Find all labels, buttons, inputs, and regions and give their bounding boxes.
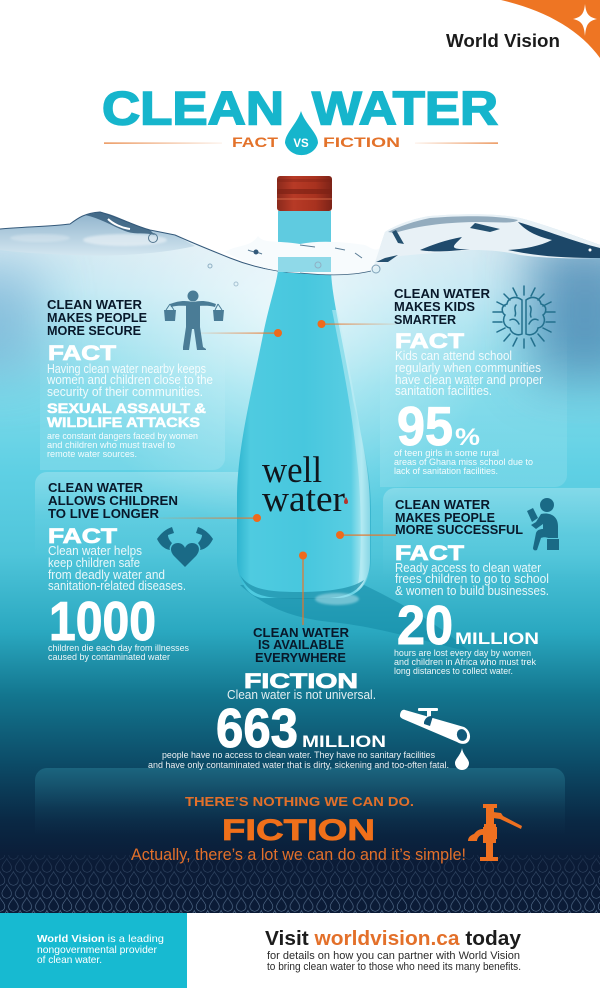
panel: nothing we can do background — [35, 768, 565, 835]
icon: brand drop — [344, 497, 348, 504]
block: makes people more secure: FACT — [48, 342, 116, 365]
footer: teal about box — [0, 913, 187, 988]
block: makes people more successful — [394, 497, 549, 677]
connector: live longer — [160, 514, 261, 522]
subtitle: Fact vs Fiction: FICTION — [323, 134, 400, 150]
footer: teal about box: nongovernmental provider — [37, 944, 157, 956]
block: makes kids smarter: have clean water and proper — [395, 373, 543, 387]
block: nothing we can do, fiction — [131, 795, 466, 864]
block: available everywhere, fiction: 663 — [216, 697, 298, 759]
icon: title water drop: VS — [293, 138, 309, 150]
logo corner: orange arc with star — [501, 0, 600, 58]
block: makes people more successful: FACT — [395, 542, 464, 565]
block: makes kids smarter: MAKES KIDS — [394, 299, 475, 314]
block: makes people more successful: CLEAN WATER — [395, 497, 491, 512]
block: allows children to live longer: keep children safe — [48, 556, 140, 570]
block: makes kids smarter: Kids can attend school — [395, 349, 512, 363]
block: makes people more secure: MAKES PEOPLE — [47, 310, 147, 325]
connector: smarter — [318, 320, 396, 328]
title: Clean Water — [102, 82, 498, 134]
block: makes people more successful: long distances to collect water. — [394, 666, 513, 677]
block: makes people more secure: Having clean water nearby keeps — [47, 362, 206, 376]
block: makes people more successful: & women to build businesses. — [395, 584, 549, 598]
text: bottle brand well water: water — [262, 479, 345, 520]
block: available everywhere, fiction: EVERYWHERE — [255, 650, 346, 665]
block: makes people more secure: WILDLIFE ATTACKS — [47, 415, 200, 430]
block: makes kids smarter — [394, 286, 543, 477]
block: makes people more successful: Ready access to clean water — [395, 561, 541, 575]
block: makes people more successful: MAKES PEOPLE — [395, 510, 495, 525]
block: available everywhere, fiction: FICTION — [244, 670, 358, 693]
block: makes kids smarter: areas of Ghana miss school due to — [394, 457, 533, 468]
block: makes people more secure: MORE SECURE — [47, 323, 141, 338]
block: allows children to live longer: CLEAN WATER — [48, 480, 144, 495]
block: makes kids smarter: sanitation facilities. — [395, 384, 492, 398]
block: makes kids smarter: CLEAN WATER — [394, 286, 491, 301]
panel: bottle floor shadow — [240, 583, 470, 652]
block: available everywhere, fiction — [148, 625, 449, 771]
icon: heart with muscle arms — [157, 527, 213, 567]
block: makes people more secure — [46, 297, 213, 460]
block: makes people more successful: frees children to go to school — [395, 572, 549, 586]
block: makes people more successful: 20 — [397, 594, 453, 656]
block: makes people more secure: are constant dangers faced by women — [47, 431, 198, 442]
icon: title water drop — [285, 111, 318, 155]
block: makes kids smarter: FACT — [395, 330, 464, 353]
block: makes people more successful: MORE SUCCESSFUL — [395, 522, 523, 537]
block: available everywhere, fiction: CLEAN WATER — [253, 625, 350, 640]
subtitle: Fact vs Fiction — [104, 134, 498, 150]
footer: call to action: Visit worldvision.ca today — [265, 928, 522, 950]
icon: pipe with falling drop — [400, 708, 470, 770]
block: makes people more secure: and children who must travel to — [47, 440, 175, 451]
footer: teal about box: of clean water. — [37, 954, 102, 966]
block: allows children to live longer: 1000 — [49, 590, 156, 652]
block: available everywhere, fiction: people have no access to clean water. They have no sanitary facilities — [162, 750, 435, 761]
block: allows children to live longer: caused by contaminated water — [48, 652, 170, 663]
block: makes people more secure: remote water sources. — [47, 449, 137, 460]
block: makes people more successful: hours are lost every day by women — [394, 648, 531, 659]
footer: call to action — [265, 928, 522, 973]
block: allows children to live longer: TO LIVE LONGER — [48, 506, 160, 521]
block: makes kids smarter: of teen girls in some rural — [394, 448, 499, 459]
footer: call to action: for details on how you can partner with World Vision — [267, 950, 520, 962]
block: nothing we can do, fiction: FICTION — [222, 814, 375, 847]
block: available everywhere, fiction: and have only contaminated water that is dirty, sickening and too-often fatal. — [148, 760, 449, 771]
footer: call to action: to bring clean water to those who need its many benefits. — [267, 961, 521, 973]
connector: available everywhere — [299, 552, 307, 625]
block: nothing we can do, fiction: Actually, there’s a lot we can do and it’s simple! — [131, 845, 466, 864]
background: water body — [0, 210, 600, 913]
subtitle: Fact vs Fiction: FACT — [232, 134, 279, 150]
icon: person reading — [527, 498, 559, 550]
wave splash surface — [0, 212, 600, 286]
connector: successful — [336, 531, 396, 539]
block: allows children to live longer: sanitation-related diseases. — [48, 579, 186, 593]
block: makes people more successful: MILLION — [455, 629, 539, 648]
block: makes kids smarter: lack of sanitation facilities. — [394, 466, 498, 477]
panel: smarter background — [380, 320, 567, 487]
connector: secure — [200, 329, 282, 337]
panel: successful background — [383, 488, 600, 580]
block: allows children to live longer: FACT — [48, 525, 117, 548]
block: nothing we can do, fiction: THERE’S NOTHING WE CAN DO. — [185, 795, 414, 809]
panel: secure background — [40, 330, 225, 470]
block: makes people more secure: women and children close to the — [46, 373, 213, 387]
block: available everywhere, fiction: Clean water is not universal. — [227, 688, 376, 702]
block: allows children to live longer: ALLOWS CHILDREN — [48, 493, 178, 508]
title: Clean Water: WATER — [312, 82, 498, 134]
block: available everywhere, fiction: MILLION — [302, 732, 386, 751]
block: makes kids smarter: % — [455, 424, 480, 451]
block: allows children to live longer: from deadly water and — [48, 568, 165, 582]
block: makes kids smarter: SMARTER — [394, 312, 457, 327]
block: allows children to live longer — [48, 480, 189, 663]
panel: live longer background — [35, 472, 240, 560]
icon: brain with rays — [493, 286, 555, 348]
block: allows children to live longer: children die each day from illnesses — [48, 643, 189, 654]
block: makes people more secure: SEXUAL ASSAULT & — [47, 401, 206, 416]
text: bottle brand well water — [262, 450, 345, 520]
block: makes kids smarter: regularly when communities — [395, 361, 541, 375]
block: makes people more secure: security of their communities. — [47, 385, 203, 399]
logo: World Vision: World Vision — [446, 31, 560, 51]
bottle — [237, 176, 371, 605]
block: makes kids smarter: 95 — [397, 395, 453, 457]
text: bottle brand well water: well — [262, 450, 322, 491]
block: allows children to live longer: Clean water helps — [48, 544, 142, 558]
drop pattern band — [0, 855, 600, 913]
icon: orange water pump — [468, 804, 522, 861]
block: makes people more secure: CLEAN WATER — [47, 297, 143, 312]
title: Clean Water: CLEAN — [102, 82, 284, 134]
block: available everywhere, fiction: IS AVAILABLE — [258, 637, 344, 652]
block: makes people more successful: and children in Africa who must trek — [394, 657, 536, 668]
footer: teal about box: World Vision is a leading — [37, 933, 164, 945]
icon: person carrying buckets — [164, 290, 224, 350]
